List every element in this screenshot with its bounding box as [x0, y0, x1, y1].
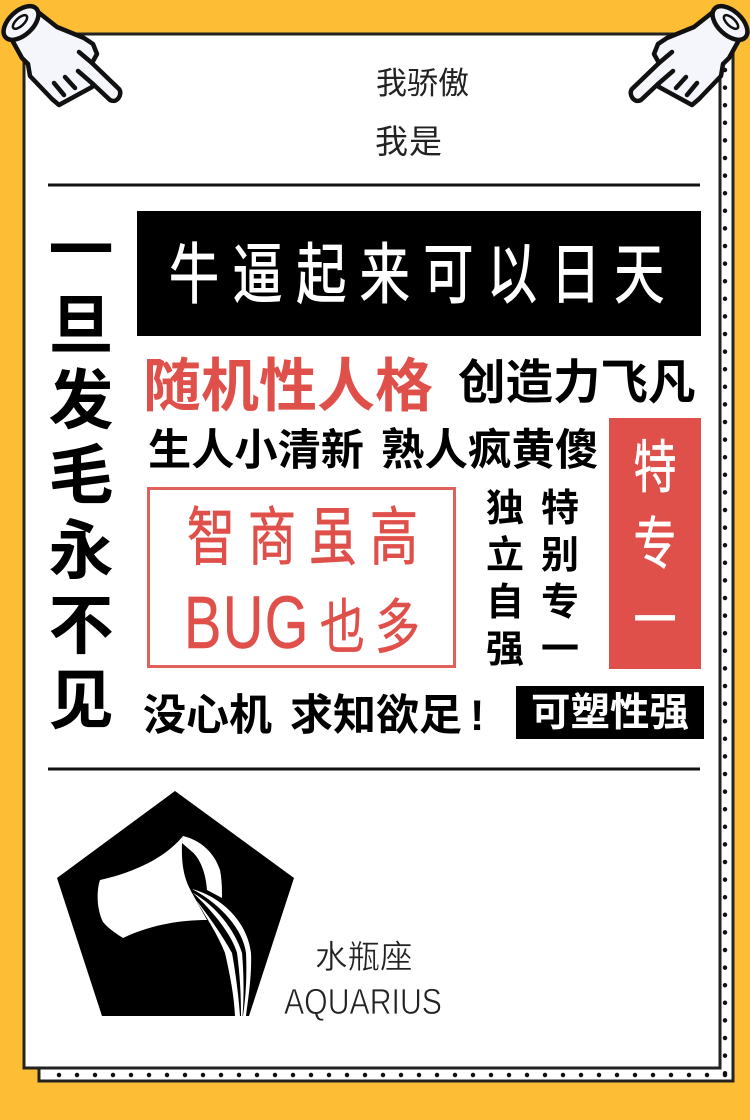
- vertical text: 特别专一: 特: [541, 488, 579, 530]
- vertical heading: 见: [48, 664, 114, 737]
- tag: 可塑性强: [516, 686, 704, 739]
- vertical heading: 不: [48, 589, 114, 662]
- red panel text: 一: [634, 590, 676, 653]
- vertical text: 独立自强: 自: [486, 582, 524, 624]
- text: 生人小清新: 生人小清新: [148, 427, 364, 475]
- vertical heading: 发: [48, 364, 114, 437]
- vertical text: 特别专一: 别: [541, 535, 579, 577]
- vertical text: 特别专一: 一: [541, 629, 579, 671]
- vertical text: 特别专一: [541, 488, 579, 671]
- icon: left pointing hand: [1, 4, 122, 108]
- text: 我骄傲: 我骄傲: [376, 66, 469, 101]
- boxed line 1: 智商虽高: [187, 504, 431, 574]
- vertical text: 独立自强: [486, 488, 524, 671]
- vertical text: 特别专一: 专: [541, 582, 579, 624]
- vertical heading: 永: [48, 514, 114, 587]
- heading: 随机性人格: 随机性人格: [143, 354, 433, 419]
- vertical heading: [48, 214, 114, 737]
- vertical heading: 毛: [48, 439, 114, 512]
- label: 水瓶座: 水瓶座: [315, 939, 413, 975]
- red panel text: 专: [634, 513, 676, 577]
- text: 求知欲足: 求知欲足!: [290, 692, 484, 740]
- red panel: 特专一: [609, 418, 701, 669]
- boxed line 2: BUG也多: [184, 581, 430, 664]
- banner: black headline: [137, 211, 701, 336]
- text: 我是: 我是: [375, 123, 443, 160]
- boxed text panel: [147, 487, 456, 668]
- red panel text: 特: [634, 437, 676, 500]
- text: 熟人疯黄傻: 熟人疯黄傻: [381, 427, 598, 475]
- icon: right pointing hand: [628, 4, 750, 108]
- text: 没心机: 没心机: [143, 692, 272, 740]
- vertical text: 独立自强: 独: [486, 488, 524, 530]
- label: AQUARIUS: AQUARIUS: [284, 981, 442, 1022]
- heading: 创造力飞凡: 创造力飞凡: [458, 357, 696, 410]
- banner text: 牛逼起来可以日天: [169, 238, 678, 312]
- red panel text: [634, 437, 676, 653]
- tag text: 可塑性强: [531, 691, 689, 735]
- icon: aquarius pentagon: [57, 791, 294, 1016]
- vertical text: 独立自强: 强: [486, 629, 524, 671]
- vertical heading: 一: [48, 214, 114, 287]
- vertical text: 独立自强: 立: [486, 535, 524, 577]
- vertical heading: 旦: [48, 289, 114, 362]
